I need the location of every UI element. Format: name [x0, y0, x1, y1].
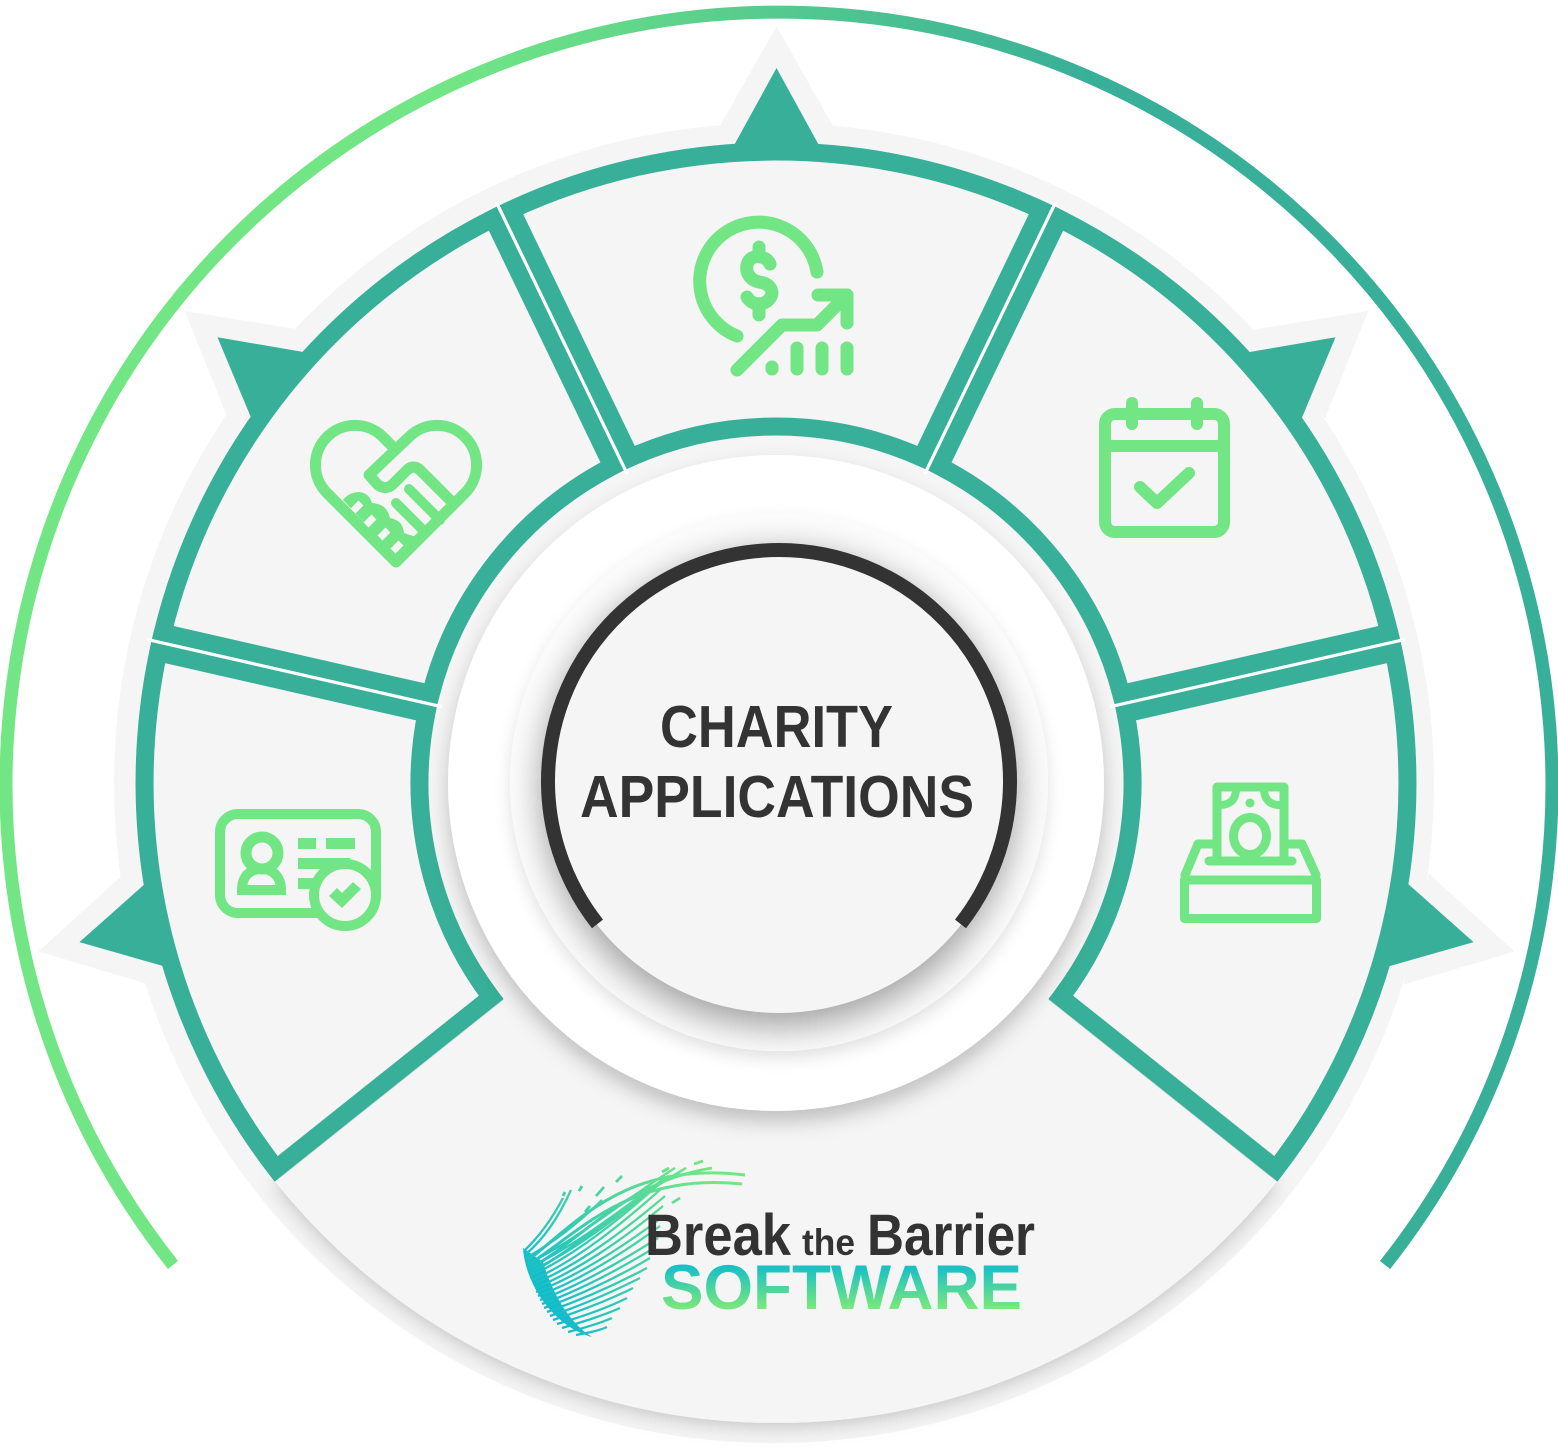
logo wordmark: the [802, 1222, 855, 1263]
white gaps between wedges [147, 202, 1405, 707]
icon: calendar with check [1105, 403, 1224, 532]
title [580, 694, 974, 830]
hub: dark arc [548, 550, 1010, 924]
logo wordmark: Barrier [867, 1203, 1035, 1268]
wedge panels ring [101, 152, 1451, 1182]
icon: id card with check [220, 814, 376, 926]
teal pointer triangles [70, 68, 1483, 986]
panel: id card wedge [101, 597, 518, 1182]
title: CHARITY [660, 694, 893, 760]
logo wordmark [645, 1203, 1035, 1268]
panel: growth wedge [511, 152, 1041, 458]
panel: calendar wedge [865, 182, 1435, 787]
icon: heart handshake [315, 425, 477, 562]
title: APPLICATIONS [580, 764, 974, 830]
panel: donation wedge [1034, 597, 1451, 1182]
icon: coin and growth arrow [700, 222, 847, 370]
logo swoosh [523, 1161, 745, 1337]
hub: inner disc [547, 549, 1011, 1013]
hub: soft middle disc [510, 513, 1048, 1051]
panel: handshake wedge [117, 182, 687, 787]
inner grey band [428, 435, 1124, 1131]
icon: donation box [1184, 787, 1316, 918]
hub: inner shadow [541, 551, 1017, 1027]
logo software text: SOFTWARE [661, 1253, 1022, 1323]
hub: white disc [448, 455, 1104, 1111]
logo wordmark: Break [645, 1203, 792, 1268]
logo: Break the Barrier Software [523, 1161, 1035, 1337]
panel: bottom logo sector [276, 783, 1276, 1423]
